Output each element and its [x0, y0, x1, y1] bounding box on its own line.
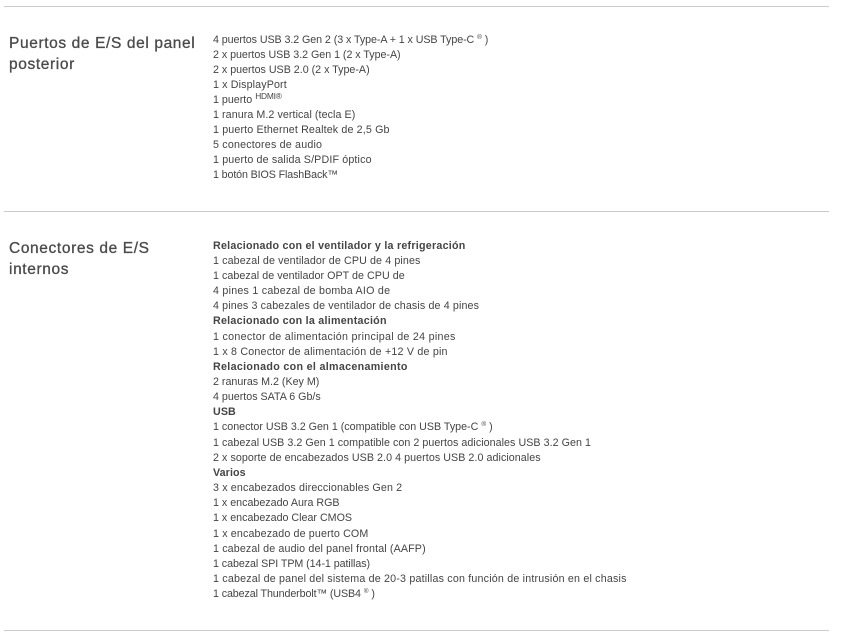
text block: internal connectors list: 1 cabezal de panel del sistema de 20-3 patillas con función de intrusión en el chasis — [213, 573, 627, 585]
text block: internal connectors list: Varios — [213, 467, 246, 479]
text block: internal connectors list: Relacionado con el ventilador y la refrigeración — [213, 240, 466, 252]
text block: internal connectors list: 4 pines 1 cabezal de bomba AIO de — [213, 285, 390, 297]
text block: rear panel ports list: 5 conectores de audio — [213, 139, 322, 151]
heading: rear panel ports: Puertos de E/S del panel — [9, 35, 195, 52]
text block: internal connectors list: 2 ranuras M.2 (Key M) — [213, 376, 319, 388]
text block: internal connectors list: 1 cabezal de ventilador de CPU de 4 pines — [213, 255, 421, 267]
text block: rear panel ports list: 1 botón BIOS FlashBack™ — [213, 169, 338, 181]
text block: internal connectors list — [213, 240, 627, 600]
text block: internal connectors list: 1 x encabezado Aura RGB — [213, 497, 340, 509]
text block: internal connectors list: 1 cabezal de ventilador OPT de CPU de — [213, 270, 405, 282]
text block: internal connectors list: 1 x 8 Conector de alimentación de +12 V de pin — [213, 346, 448, 358]
text block: internal connectors list: 4 pines 3 cabezales de ventilador de chasis de 4 pines — [213, 300, 479, 312]
text block: internal connectors list: Relacionado con la alimentación — [213, 315, 387, 327]
text block: internal connectors list: USB — [213, 406, 236, 418]
text block: internal connectors list: 1 cabezal USB 3.2 Gen 1 compatible con 2 puertos adicionales USB 3.2 Gen 1 — [213, 437, 591, 449]
text block: rear panel ports list: 1 puerto Ethernet Realtek de 2,5 Gb — [213, 124, 390, 136]
text block: internal connectors list: 1 conector de alimentación principal de 24 pines — [213, 331, 456, 343]
heading: internal connectors — [9, 240, 150, 278]
text block: rear panel ports list: 1 ranura M.2 vertical (tecla E) — [213, 109, 355, 121]
text block: internal connectors list: 1 cabezal SPI TPM (14-1 patillas) — [213, 558, 370, 570]
heading: rear panel ports: posterior — [9, 56, 75, 73]
text block: rear panel ports list: 1 x DisplayPort — [213, 79, 287, 91]
heading: rear panel ports — [9, 35, 195, 73]
heading: internal connectors: internos — [9, 261, 69, 278]
text block: internal connectors list: Relacionado con el almacenamiento — [213, 361, 408, 373]
text block: internal connectors list: 3 x encabezados direccionables Gen 2 — [213, 482, 402, 494]
text block: rear panel ports list: 4 puertos USB 3.2 Gen 2 (3 x Type-A + 1 x USB Type-C ® ) — [213, 34, 488, 46]
text block: internal connectors list: 4 puertos SATA 6 Gb/s — [213, 391, 321, 403]
text block: rear panel ports list: 1 puerto HDMI® — [213, 91, 282, 106]
heading: internal connectors: Conectores de E/S — [9, 240, 150, 257]
text block: internal connectors list: 1 x encabezado de puerto COM — [213, 528, 368, 540]
text block: internal connectors list: 1 conector USB 3.2 Gen 1 (compatible con USB Type-C ® ) — [213, 421, 493, 433]
text block: internal connectors list: 2 x soporte de encabezados USB 2.0 4 puertos USB 2.0 adicionales — [213, 452, 541, 464]
text block: rear panel ports list: 2 x puertos USB 3.2 Gen 1 (2 x Type-A) — [213, 49, 401, 61]
text block: internal connectors list: 1 cabezal Thunderbolt™ (USB4 ® ) — [213, 588, 375, 600]
text block: rear panel ports list: 2 x puertos USB 2.0 (2 x Type-A) — [213, 64, 370, 76]
text block: internal connectors list: 1 x encabezado Clear CMOS — [213, 512, 352, 524]
text block: rear panel ports list: 1 puerto de salida S/PDIF óptico — [213, 154, 372, 166]
text block: internal connectors list: 1 cabezal de audio del panel frontal (AAFP) — [213, 543, 426, 555]
text block: rear panel ports list — [213, 34, 488, 181]
